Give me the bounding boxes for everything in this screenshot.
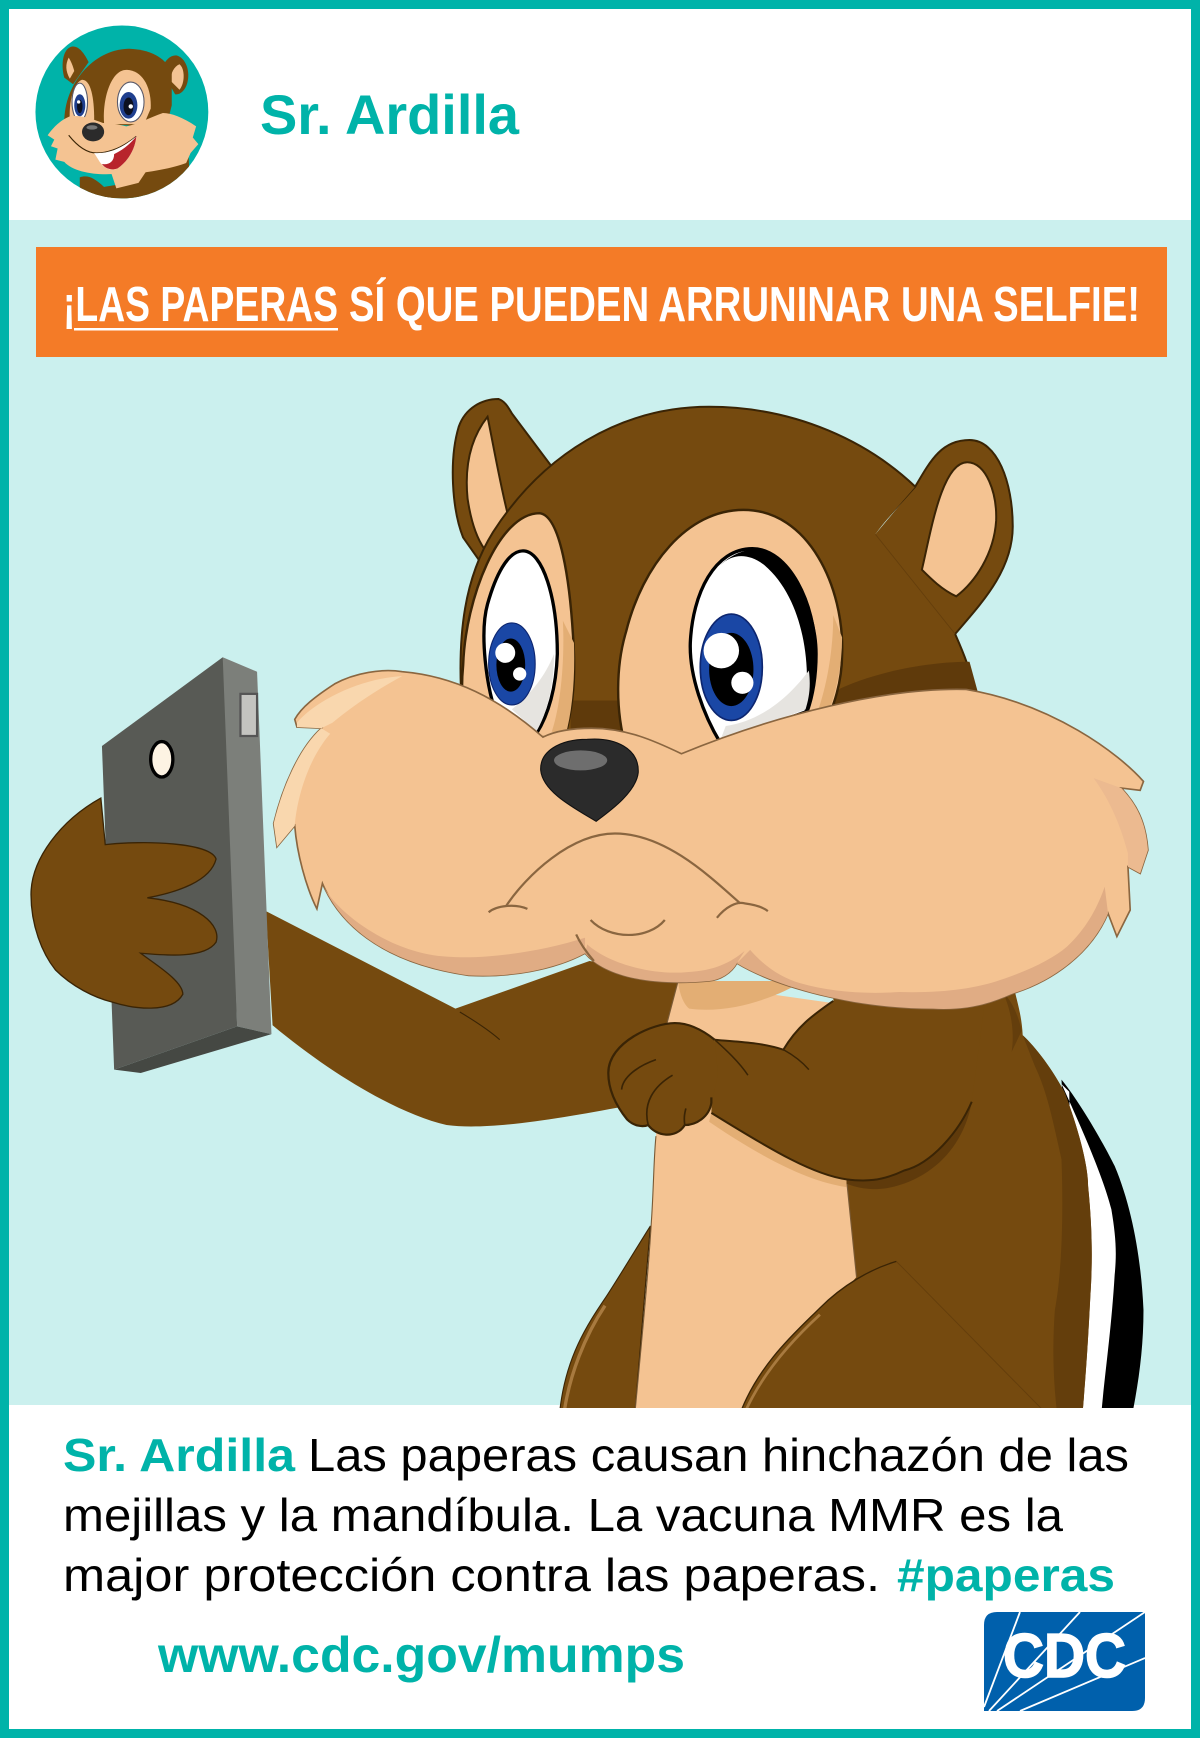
left eye [484, 551, 557, 734]
swollen cheeks [274, 671, 1148, 1009]
nose [541, 739, 638, 821]
logo: CDC: CDC [1003, 1622, 1126, 1691]
holding hand [31, 798, 217, 1008]
header: avatar and name [33, 22, 520, 202]
phone [102, 657, 271, 1073]
body [560, 981, 1092, 1413]
face shading [570, 662, 978, 730]
illustration: squirrel taking a selfie [31, 399, 1148, 1413]
caption text line 1: Las paperas causan hinchazón de las [308, 1429, 1129, 1481]
right eye [690, 549, 818, 743]
eye patches [462, 510, 842, 770]
banner text [63, 278, 1140, 332]
paw [620, 1024, 715, 1134]
right thigh [743, 1284, 851, 1408]
caption text line 1: Sr. Ardilla [63, 1429, 295, 1481]
heading: name: Sr. Ardilla [260, 83, 520, 146]
tail [1061, 1080, 1143, 1413]
icon: squirrel avatar [33, 22, 211, 202]
caption text line 3: #paperas [897, 1549, 1115, 1601]
panel: illustration background [9, 220, 1191, 1405]
logo: CDC [984, 1612, 1145, 1711]
ears [453, 399, 1013, 634]
banner text: ¡LAS PAPERAS [63, 278, 338, 332]
folded arm [608, 992, 986, 1189]
caption text line 2: mejillas y la mandíbula. La vacuna MMR es la [63, 1489, 1063, 1541]
panel: caption [9, 1408, 1191, 1729]
banner: headline [36, 247, 1167, 357]
frown and mouth [489, 834, 768, 961]
head [460, 406, 968, 729]
website link: www.cdc.gov/mumps [157, 1627, 685, 1683]
extended arm [266, 911, 687, 1127]
caption text line 3: major protección contra las paperas. [63, 1549, 880, 1601]
